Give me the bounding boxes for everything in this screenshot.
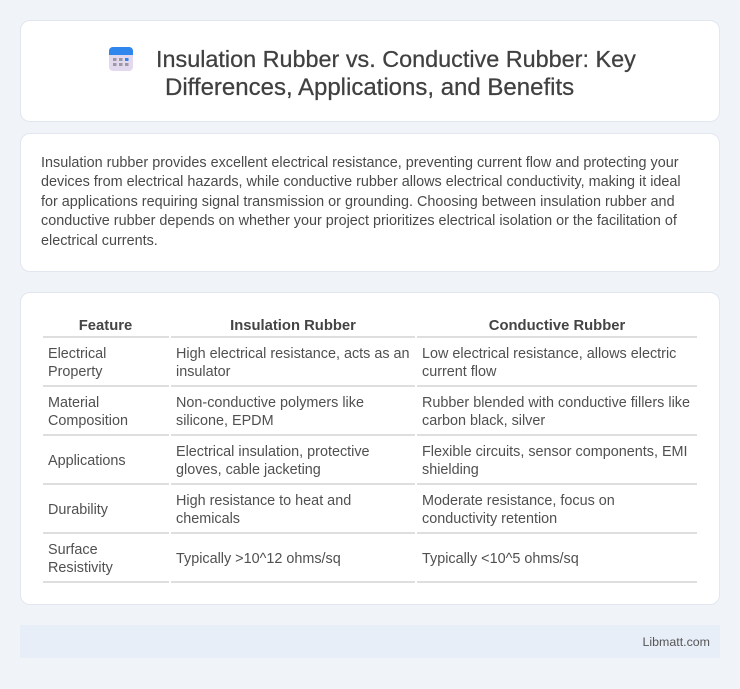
- intro paragraph: [41, 154, 681, 248]
- comparison table: Typically <10^5 ohms/sq: [422, 551, 579, 567]
- comparison table: Resistivity: [48, 560, 113, 576]
- comparison table: silicone, EPDM: [176, 413, 274, 429]
- comparison table: Electrical insulation, protective: [176, 444, 370, 460]
- comparison table: Feature: [79, 318, 132, 334]
- comparison table: current flow: [422, 364, 496, 380]
- comparison table: gloves, cable jacketing: [176, 462, 321, 478]
- intro paragraph: electrical currents.: [41, 232, 158, 248]
- comparison table: Applications: [48, 453, 126, 469]
- comparison table: Property: [48, 364, 102, 380]
- intro paragraph: for applications requiring signal transmission or grounding. Choosing between insulation rubber and: [41, 194, 675, 210]
- comparison table: Electrical: [48, 346, 106, 362]
- intro paragraph: conductive rubber depends on whether your project prioritizes electrical isolation or the facilitation of: [41, 213, 677, 229]
- comparison table: Surface: [48, 542, 98, 558]
- comparison table: Low electrical resistance, allows electric: [422, 346, 676, 362]
- comparison table: carbon black, silver: [422, 413, 545, 429]
- title: Differences, Applications, and Benefits: [165, 74, 574, 101]
- intro paragraph: devices from electrical hazards, while conductive rubber allows electrical conductivity, making it ideal: [41, 174, 681, 190]
- comparison table: insulator: [176, 364, 230, 380]
- title: [156, 46, 636, 101]
- panel: comparison table: [20, 292, 720, 605]
- comparison table: conductivity retention: [422, 511, 557, 527]
- comparison table: High electrical resistance, acts as an: [176, 346, 410, 362]
- comparison table: [43, 318, 697, 583]
- comparison table: Non-conductive polymers like: [176, 395, 364, 411]
- comparison table: High resistance to heat and: [176, 493, 351, 509]
- footer bar: [20, 625, 720, 658]
- comparison table: Insulation Rubber: [230, 318, 356, 334]
- panel: intro text: [20, 133, 720, 272]
- title: Insulation Rubber vs. Conductive Rubber: Key: [156, 46, 636, 72]
- footer text: Libmatt.com: [643, 635, 710, 649]
- comparison table: Typically >10^12 ohms/sq: [176, 551, 341, 567]
- comparison table: Durability: [48, 502, 108, 518]
- intro paragraph: Insulation rubber provides excellent electrical resistance, preventing current flow and protecting your: [41, 154, 679, 170]
- comparison table: Rubber blended with conductive fillers like: [422, 395, 690, 411]
- comparison table: Conductive Rubber: [489, 318, 625, 334]
- icon: calendar: [109, 47, 133, 71]
- comparison table: Material: [48, 395, 99, 411]
- comparison table: Composition: [48, 413, 128, 429]
- comparison table: shielding: [422, 462, 479, 478]
- comparison table: chemicals: [176, 511, 240, 527]
- comparison table: Flexible circuits, sensor components, EMI: [422, 444, 688, 460]
- comparison table: Moderate resistance, focus on: [422, 493, 615, 509]
- panel: title card: [20, 20, 720, 122]
